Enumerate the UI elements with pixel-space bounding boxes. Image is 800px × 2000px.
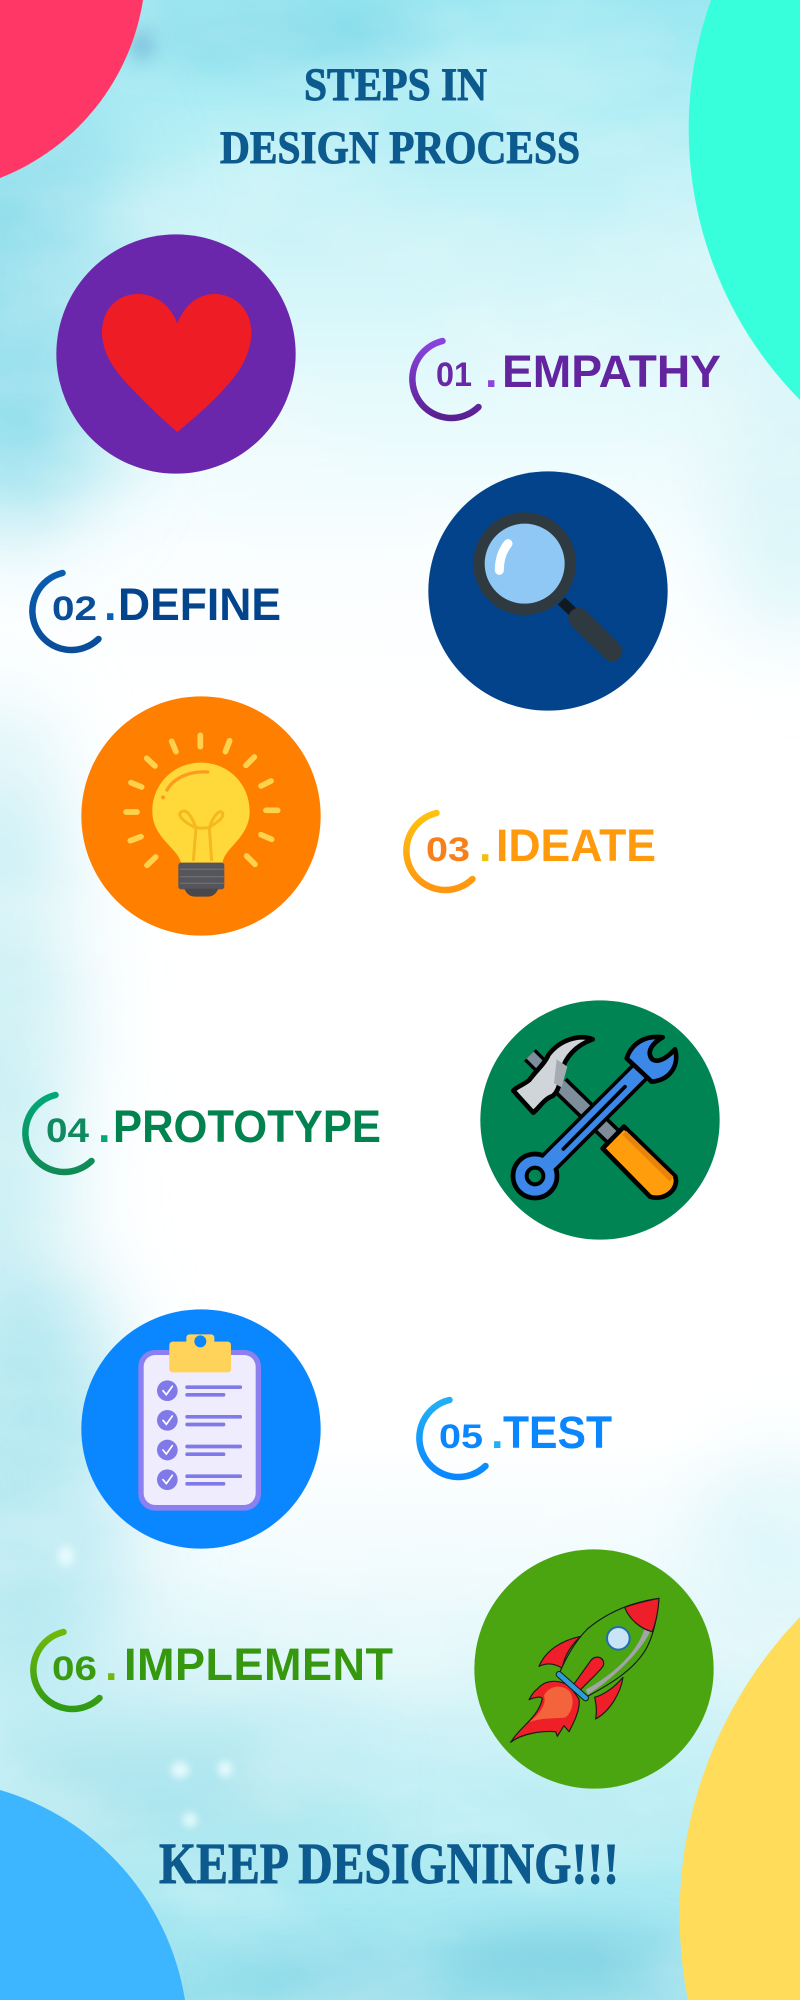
label: 03 ideate: IDEATE — [496, 820, 656, 871]
title — [220, 59, 580, 174]
number 03: 03 — [426, 831, 470, 869]
step name empathy: . — [485, 346, 498, 397]
progress arc 03 — [406, 813, 472, 890]
label: 02 define: DEFINE — [118, 579, 281, 630]
progress arc 01 — [412, 341, 478, 418]
label: 06 implement — [33, 1632, 393, 1709]
corner shape: yellow bottom-right — [680, 1617, 800, 2000]
label: 04 prototype: PROTOTYPE — [113, 1101, 381, 1152]
corner shape: pink top-left — [0, 0, 143, 178]
panel: define icon (magnifier) — [428, 471, 668, 711]
step name prototype: . — [98, 1101, 111, 1152]
closing message: KEEP DESIGNING!!! — [159, 1831, 619, 1896]
title: STEPS IN — [304, 59, 487, 111]
panel: test icon (clipboard) — [81, 1309, 321, 1549]
progress arc 04 — [25, 1095, 91, 1172]
label: 01 empathy — [412, 341, 721, 418]
number 06: 06 — [52, 1650, 97, 1688]
label: 05 test: TEST — [503, 1407, 612, 1458]
number 04: 04 — [46, 1112, 89, 1150]
label: 05 test — [419, 1400, 612, 1477]
title: DESIGN PROCESS — [220, 122, 580, 174]
panel: implement icon (rocket) — [474, 1549, 714, 1789]
corner shape: teal top-right — [689, 0, 800, 400]
progress arc 02 — [32, 573, 98, 650]
number 01: 01 — [436, 356, 472, 394]
label: 01 empathy: EMPATHY — [502, 346, 721, 397]
panel: prototype icon (hammer and wrench) — [480, 1000, 720, 1240]
step name ideate: . — [479, 820, 492, 871]
panel: ideate icon (light bulb) — [81, 696, 321, 936]
step name implement: . — [105, 1639, 118, 1690]
progress arc 06 — [33, 1632, 100, 1709]
number 02: 02 — [52, 590, 97, 628]
step name define: . — [104, 579, 117, 630]
corner shape: blue bottom-left — [0, 1790, 185, 2000]
label: 06 implement: IMPLEMENT — [124, 1639, 393, 1690]
panel: empathy icon (heart) — [56, 234, 296, 474]
label: 03 ideate — [406, 813, 656, 890]
number 05: 05 — [439, 1418, 483, 1456]
step name test: . — [491, 1407, 504, 1458]
label: 02 define — [32, 573, 281, 650]
label: 04 prototype — [25, 1095, 381, 1172]
progress arc 05 — [419, 1400, 486, 1477]
